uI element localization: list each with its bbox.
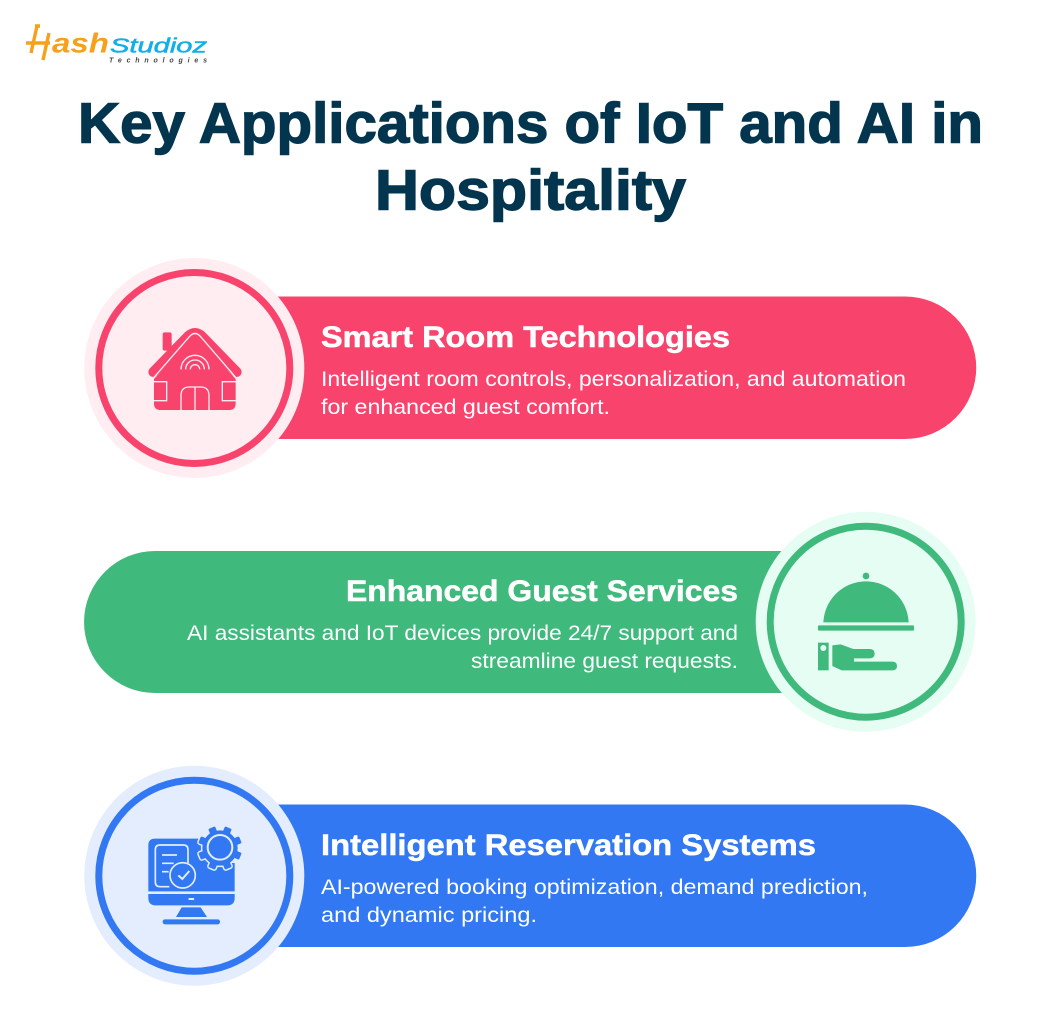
title (78, 92, 983, 222)
description: smart room: Intelligent room controls, personalization, and automation (321, 368, 906, 391)
green banner (84, 551, 870, 693)
panel: Intelligent Reservation Systems (84, 766, 976, 986)
icon: cloche and hand (818, 573, 914, 670)
logo: HashStudioz Technologies: Studioz (110, 36, 207, 58)
title: Hospitality (375, 158, 686, 222)
logo: HashStudioz Technologies: ash (52, 28, 109, 59)
heading: Enhanced Guest Services: Enhanced Guest Services (346, 575, 738, 608)
description: smart room: for enhanced guest comfort. (321, 396, 610, 419)
title: Key Applications of IoT and AI in (78, 92, 983, 156)
icon circle: serving cloche (756, 512, 976, 732)
icon circle: monitor and gear (84, 766, 304, 986)
description: reservation (321, 876, 868, 927)
description: guest services: streamline guest requests. (471, 650, 738, 673)
description: smart room (321, 368, 906, 419)
icon: computer with gear (148, 826, 242, 924)
icon circle: house (84, 258, 304, 478)
description: reservation: AI-powered booking optimization, demand prediction, (321, 876, 868, 899)
description: guest services: AI assistants and IoT devices provide 24/7 support and (187, 622, 738, 645)
description: guest services (187, 622, 738, 673)
logo: HashStudioz Technologies (26, 26, 207, 64)
logo: HashStudioz Technologies: Technologies (109, 58, 207, 64)
heading: Intelligent Reservation Systems: Intelligent Reservation Systems (321, 829, 816, 862)
heading: Smart Room Technologies: Smart Room Technologies (321, 321, 730, 354)
description: reservation: and dynamic pricing. (321, 904, 537, 927)
icon: smart house (153, 332, 237, 410)
blue banner (190, 804, 976, 947)
panel: Smart Room Technologies (84, 258, 976, 478)
pink banner (190, 296, 976, 439)
panel: Enhanced Guest Services (84, 512, 976, 732)
